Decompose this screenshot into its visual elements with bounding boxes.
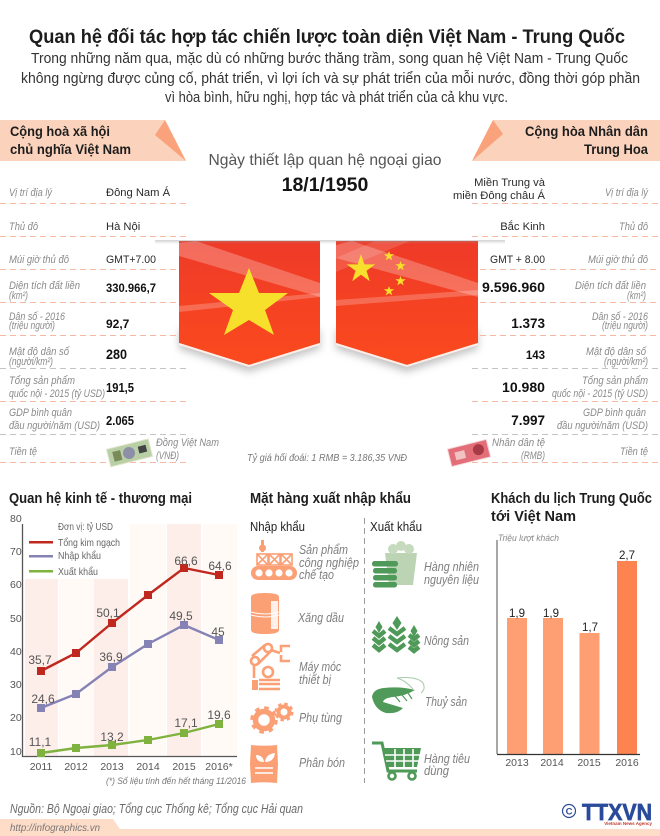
label: fertilizer: Phân bón bbox=[299, 756, 345, 770]
chart footnote: (*) Số liệu tính đến hết tháng 11/2016 bbox=[106, 776, 247, 787]
heading: tourism: tới Việt Nam bbox=[491, 509, 576, 525]
table: China bbox=[447, 177, 649, 467]
table: Vietnam: Diện tích đất liền bbox=[9, 280, 80, 292]
ribbon: Vietnam: chủ nghĩa Việt Nam bbox=[10, 142, 131, 157]
label: manufactured goods: chế tạo bbox=[299, 568, 334, 582]
data labels: 45 bbox=[211, 625, 225, 639]
label: petroleum: Xăng dầu bbox=[297, 611, 344, 625]
table: China: Diện tích đất liền bbox=[575, 280, 646, 292]
table: Vietnam: 92,7 bbox=[106, 317, 130, 331]
table: China: 143 bbox=[526, 350, 545, 362]
footer band: http://infographics.vn bbox=[10, 822, 100, 834]
series: total bbox=[37, 564, 223, 675]
data labels: 64,6 bbox=[208, 559, 232, 573]
table: Vietnam bbox=[9, 186, 219, 467]
logo: TTXVN: Vietnam News Agency bbox=[604, 821, 652, 826]
icon: raw materials bbox=[372, 541, 417, 588]
data labels: 19,6 bbox=[207, 708, 231, 722]
table: China: GDP bình quân bbox=[583, 407, 646, 419]
bar chart: tourists: 2,7 bbox=[619, 550, 635, 562]
data labels: 13,2 bbox=[100, 730, 124, 744]
footer band bbox=[0, 819, 660, 836]
table: Vietnam: (người/km²) bbox=[9, 356, 53, 368]
y axis labels: 60 bbox=[10, 579, 22, 591]
bar chart: tourists bbox=[497, 533, 640, 769]
diplomatic date: 18/1/1950 bbox=[282, 174, 369, 196]
x axis labels: 2015 bbox=[172, 761, 196, 773]
table: Vietnam: quốc nội - 2015 (tỷ USD) bbox=[9, 388, 105, 400]
legend: Đơn vị: tỷ USD bbox=[58, 521, 113, 533]
logo: TTXVN: C bbox=[566, 806, 573, 818]
panel shadow under date bbox=[155, 240, 505, 244]
line chart: trade bbox=[10, 513, 237, 773]
comparison table dividers bbox=[0, 204, 660, 462]
table: China: Tiền tệ bbox=[620, 446, 648, 458]
table: China: Thủ đô bbox=[619, 221, 648, 233]
heading: tourism bbox=[491, 491, 652, 525]
table: Vietnam: Dân số - 2016 bbox=[9, 311, 66, 323]
label: raw materials: nguyên liệu bbox=[424, 573, 479, 587]
y axis labels bbox=[10, 513, 22, 758]
y axis labels: 30 bbox=[10, 679, 22, 691]
icon: robot arm bbox=[251, 644, 290, 690]
label: machinery: thiết bị bbox=[299, 673, 332, 687]
y axis labels: 10 bbox=[10, 746, 22, 758]
series: exports bbox=[37, 720, 223, 757]
ribbon: China: Trung Hoa bbox=[584, 142, 648, 157]
table: China: 7.997 bbox=[511, 413, 545, 428]
ribbon: Vietnam bbox=[0, 120, 186, 161]
y axis labels: 20 bbox=[10, 712, 22, 724]
icon: shrimp bbox=[372, 678, 424, 713]
intro text: không ngừng được củng cố, phát triển, vì lợi ích và sự phát triển của mỗi nước, đồng thời góp phần bbox=[21, 70, 640, 87]
data labels: 49,5 bbox=[169, 609, 193, 623]
label: spare parts: Phụ tùng bbox=[299, 711, 342, 725]
label: manufactured goods: công nghiệp bbox=[299, 556, 359, 570]
label: manufactured goods: Sản phẩm bbox=[299, 543, 348, 557]
intro text: vì hòa bình, hữu nghị, hợp tác và phát triển của cả khu vực. bbox=[165, 90, 508, 106]
bar chart: tourists: 2016 bbox=[615, 757, 639, 769]
bar chart: tourists: 1,7 bbox=[582, 622, 598, 634]
ribbon: Vietnam: Cộng hoà xã hội bbox=[10, 124, 110, 139]
bar chart: tourists: 2015 bbox=[577, 757, 601, 769]
data labels: 35,7 bbox=[28, 653, 52, 667]
source: Nguồn: Bộ Ngoại giao; Tổng cục Thống kê; Tổng cục Hải quan bbox=[10, 801, 303, 816]
table: Vietnam: đầu người/năm (USD) bbox=[9, 420, 100, 432]
x axis labels: 2011 bbox=[30, 761, 52, 773]
divider between goods columns bbox=[364, 518, 366, 783]
title: Quan hệ đối tác hợp tác chiến lược toàn diện Việt Nam - Trung Quốc bbox=[29, 27, 625, 48]
data labels bbox=[28, 554, 232, 749]
table: Vietnam: GMT+7.00 bbox=[106, 254, 156, 266]
table: China: 10.980 bbox=[502, 379, 545, 395]
ribbon: China: Cộng hòa Nhân dân bbox=[525, 124, 648, 139]
table: China: Tổng sản phẩm bbox=[582, 375, 648, 387]
table: China: Miền Trung và bbox=[474, 177, 546, 189]
table: China: (người/km²) bbox=[604, 356, 648, 368]
icon: factory conveyor bbox=[251, 540, 297, 580]
table: Vietnam: Múi giờ thủ đô bbox=[9, 254, 69, 266]
diplomatic date: Ngày thiết lập quan hệ ngoại giao bbox=[208, 152, 442, 169]
data labels: 24,6 bbox=[31, 692, 55, 706]
y axis labels: 80 bbox=[10, 513, 22, 525]
subheading: imports: Nhập khẩu bbox=[250, 520, 305, 534]
bar chart: tourists: Triệu lượt khách bbox=[498, 533, 559, 544]
table: Vietnam: (triệu người) bbox=[9, 320, 55, 332]
data labels: 66,6 bbox=[174, 554, 198, 568]
intro text bbox=[21, 51, 640, 106]
y axis labels: 50 bbox=[10, 613, 22, 625]
table: Vietnam: Tổng sản phẩm bbox=[9, 375, 75, 387]
label: machinery: Máy móc bbox=[299, 660, 342, 674]
heading: goods: Mặt hàng xuất nhập khẩu bbox=[250, 491, 411, 507]
data labels: 11,1 bbox=[29, 735, 52, 749]
table: China: Vị trí địa lý bbox=[605, 187, 649, 199]
legend bbox=[29, 521, 120, 578]
x axis labels: 2012 bbox=[64, 761, 88, 773]
label: consumer goods: dùng bbox=[424, 764, 449, 778]
legend: Xuất khẩu bbox=[58, 566, 98, 578]
legend: Tổng kim ngạch bbox=[58, 537, 120, 549]
table: Vietnam: Mật độ dân số bbox=[9, 346, 70, 358]
table: China: (km²) bbox=[627, 290, 646, 302]
intro text: Trong những năm qua, mặc dù có những bước thăng trầm, song quan hệ Việt Nam - Trung Quốc bbox=[31, 51, 628, 67]
label: consumer goods: Hàng tiêu bbox=[424, 752, 470, 766]
diplomatic date bbox=[208, 152, 442, 196]
table: Vietnam: Đồng Việt Nam bbox=[156, 437, 219, 449]
table: Vietnam: (km²) bbox=[9, 290, 28, 302]
exchange rate note: Tỷ giá hối đoái: 1 RMB = 3.186,35 VNĐ bbox=[247, 452, 407, 464]
label: manufactured goods bbox=[299, 543, 359, 582]
heading: trade: Quan hệ kinh tế - thương mại bbox=[9, 491, 192, 507]
legend: Nhập khẩu bbox=[58, 550, 101, 562]
y axis labels: 40 bbox=[10, 646, 22, 658]
bar chart: tourists: 2013 bbox=[505, 757, 529, 769]
table: China: 1.373 bbox=[511, 316, 545, 331]
x axis labels bbox=[30, 761, 233, 773]
label: seafood: Thuỷ sản bbox=[425, 695, 467, 709]
table: Vietnam: 2.065 bbox=[106, 414, 134, 428]
ribbon: China bbox=[472, 120, 660, 161]
table: China: Dân số - 2016 bbox=[592, 311, 649, 323]
table: China: miền Đông châu Á bbox=[453, 189, 546, 202]
icon: gears bbox=[252, 704, 292, 732]
icon: dong banknote bbox=[106, 439, 153, 467]
label: raw materials bbox=[424, 560, 479, 587]
subheading: exports: Xuất khẩu bbox=[370, 520, 422, 534]
table: Vietnam: 330.966,7 bbox=[106, 281, 156, 295]
flag: Vietnam bbox=[179, 241, 320, 372]
table: China: Múi giờ thủ đô bbox=[588, 254, 648, 266]
table: Vietnam: 191,5 bbox=[106, 381, 134, 395]
x axis labels: 2014 bbox=[136, 761, 160, 773]
label: agricultural products: Nông sản bbox=[424, 634, 469, 648]
table: China: Bắc Kinh bbox=[500, 220, 545, 233]
table: Vietnam: Tiền tệ bbox=[9, 446, 37, 458]
label: machinery bbox=[299, 660, 342, 687]
logo: TTXVN: TTXVN bbox=[582, 799, 652, 825]
x axis labels: 2016* bbox=[205, 761, 233, 773]
y axis labels: 70 bbox=[10, 546, 22, 558]
flag: China bbox=[336, 241, 478, 372]
icon: fertilizer bag bbox=[250, 745, 278, 783]
table: China: Mật độ dân số bbox=[586, 346, 647, 358]
series: imports bbox=[37, 621, 223, 712]
table: Vietnam: 280 bbox=[106, 347, 127, 362]
table: Vietnam: Hà Nội bbox=[106, 221, 140, 233]
icon: wheat bbox=[373, 616, 419, 651]
label: consumer goods bbox=[424, 752, 470, 778]
table: China: GMT + 8.00 bbox=[490, 254, 545, 266]
icon: renminbi banknote bbox=[447, 439, 491, 467]
icon: oil barrel bbox=[251, 593, 279, 634]
table: China: (RMB) bbox=[521, 450, 545, 462]
bar chart: tourists: 1,9 bbox=[543, 608, 559, 620]
bar chart: tourists: 2014 bbox=[540, 757, 564, 769]
data labels: 50,1 bbox=[96, 606, 120, 620]
table: China: 9.596.960 bbox=[482, 280, 545, 295]
icon: shopping cart bbox=[372, 743, 421, 780]
table: Vietnam: Vị trí địa lý bbox=[9, 187, 53, 199]
table: Vietnam: Đông Nam Á bbox=[106, 186, 171, 199]
table: Vietnam: (VNĐ) bbox=[156, 450, 179, 462]
table: China: Nhân dân tệ bbox=[492, 437, 545, 449]
bar chart: tourists: 1,9 bbox=[509, 608, 525, 620]
label: raw materials: Hàng nhiên bbox=[424, 560, 479, 574]
data labels: 36,9 bbox=[99, 650, 123, 664]
data labels: 17,1 bbox=[174, 716, 198, 730]
table: Vietnam: GDP bình quân bbox=[9, 407, 72, 419]
x axis labels: 2013 bbox=[100, 761, 124, 773]
table: Vietnam: Thủ đô bbox=[9, 221, 38, 233]
